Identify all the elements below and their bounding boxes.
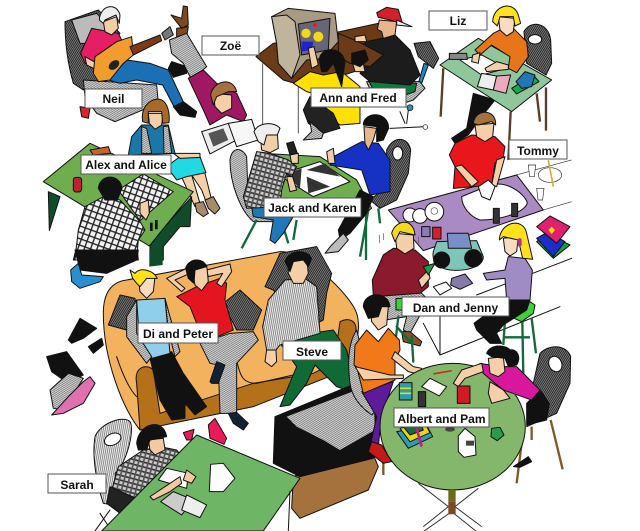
alex lower body — [71, 250, 138, 288]
neil: mug on floor — [80, 107, 90, 118]
fred: jeans — [338, 33, 383, 67]
label: Liz — [429, 11, 487, 30]
label: Alex and Alice — [81, 155, 171, 174]
plates — [403, 202, 444, 223]
karen: black trousers and shoe — [338, 190, 373, 240]
dan: face — [395, 233, 414, 254]
label: Neil: Neil — [102, 92, 125, 106]
alex: jeans — [73, 243, 138, 260]
alex table top — [43, 143, 193, 246]
steve: green trousers — [277, 330, 357, 407]
liz — [440, 6, 552, 160]
label: Steve: Steve — [296, 345, 328, 359]
peter: head — [192, 265, 208, 291]
green fruit — [491, 427, 504, 441]
steve: hair — [285, 252, 312, 272]
label: Tommy: Tommy — [517, 144, 559, 158]
trainers on the floor — [47, 318, 103, 415]
steve: hand — [265, 350, 277, 367]
jack and karen — [230, 150, 297, 248]
liz: calculator — [449, 53, 467, 59]
shoes — [68, 318, 103, 353]
chessboard — [118, 174, 173, 221]
label: Albert and Pam — [394, 408, 489, 427]
monitor — [272, 8, 338, 78]
albert: face — [370, 307, 388, 330]
dan: hand — [418, 270, 430, 288]
jenny: yellow hair — [499, 223, 533, 259]
albert: chair — [349, 330, 377, 415]
label: Tommy — [509, 140, 567, 159]
sarah: table leg — [288, 492, 290, 531]
jenny: stool — [503, 318, 536, 375]
seat — [367, 82, 425, 103]
cushion: right of peter — [223, 290, 262, 330]
alice: sandals — [195, 197, 220, 217]
karen: face — [364, 127, 377, 150]
label: Ann and Fred — [311, 88, 406, 107]
ann — [293, 47, 360, 140]
pam: chair — [527, 347, 571, 427]
desk leg lines — [263, 63, 298, 133]
jack: hand raised — [287, 142, 297, 155]
table legs — [360, 208, 380, 260]
dish — [478, 180, 495, 200]
fred: red cap — [377, 7, 403, 24]
alice: face — [148, 113, 163, 129]
tv hatching — [287, 390, 375, 450]
fred: black jacket — [353, 35, 420, 85]
di: pink shoes — [183, 418, 227, 444]
phone — [422, 378, 447, 396]
zoe: feet up — [171, 6, 188, 38]
label: Di and Peter — [138, 323, 218, 343]
pen — [433, 371, 452, 374]
tommy: hair — [473, 112, 496, 125]
zoe: newspaper — [202, 119, 258, 154]
label: Dan and Jenny — [402, 297, 509, 316]
label: Jack and Karen — [264, 198, 361, 217]
peter: red shirt — [177, 278, 233, 338]
label: Sarah — [48, 474, 106, 493]
label: Zoë — [202, 36, 259, 55]
tommy: red shirt — [449, 135, 505, 188]
neil: guitar — [93, 27, 173, 82]
pam: arms — [453, 363, 510, 403]
albert: hair — [363, 295, 390, 318]
label: Zoë: Zoë — [220, 39, 241, 53]
radio — [433, 233, 483, 270]
alex table — [43, 143, 193, 260]
jenny: face — [503, 237, 518, 256]
albert: orange shirt — [354, 328, 400, 393]
sarah: head — [148, 438, 165, 455]
alex: hair — [98, 177, 122, 200]
liz: blue book stack — [512, 72, 539, 94]
sarah table and sarah — [94, 419, 300, 531]
peter — [167, 260, 262, 430]
dan: trousers and shoe — [383, 290, 428, 333]
zoe — [169, 6, 258, 154]
stool stem and wheels — [390, 110, 427, 128]
jenny: purple shirt — [483, 257, 532, 300]
desk — [256, 20, 393, 87]
jack: face — [260, 132, 278, 153]
label: Albert and Pam: Albert and Pam — [397, 412, 486, 426]
sarah: dark trousers — [107, 487, 140, 513]
peter: grey trousers — [200, 332, 258, 413]
jenny: seat — [511, 302, 535, 322]
label: Neil — [85, 89, 142, 108]
liz: face — [498, 17, 515, 36]
ann: yellow top — [293, 72, 360, 125]
dan: red sweater — [372, 248, 428, 297]
liz: chair — [524, 24, 552, 75]
albert: chair legs — [383, 420, 563, 483]
sarah: papers and card — [158, 463, 235, 518]
liz: legs under table — [452, 93, 495, 143]
albert: purple shorts — [362, 382, 393, 447]
di: blonde hair — [130, 270, 157, 287]
steve: striped sweater — [263, 278, 320, 350]
red-edged board — [278, 162, 350, 197]
peter: arms behind head — [167, 264, 232, 292]
karen: blue jacket — [330, 142, 390, 195]
di: head — [138, 277, 155, 298]
dan — [383, 290, 428, 362]
liz: paper — [460, 55, 507, 75]
bag — [47, 352, 95, 415]
card table — [257, 153, 372, 217]
liz: table legs — [441, 68, 546, 160]
ann: hand — [308, 47, 318, 68]
liz: hands — [472, 53, 508, 72]
jenny: disc player — [451, 274, 473, 289]
karen and table — [257, 115, 411, 260]
sarah: plaid jacket — [112, 447, 195, 500]
label: Jack and Karen: Jack and Karen — [268, 201, 357, 215]
alice: hair — [142, 99, 169, 123]
sarah: hair — [137, 425, 167, 450]
jack upper body — [243, 124, 298, 208]
fred stool and chair — [338, 7, 439, 129]
albert and pam table — [349, 295, 571, 531]
purple counter — [388, 175, 543, 251]
albert: arms — [355, 352, 422, 380]
sink — [462, 184, 527, 220]
label: Steve — [283, 341, 341, 360]
alex: hand — [140, 200, 149, 220]
table base — [418, 483, 482, 531]
table leg green — [149, 250, 163, 267]
di: black trousers — [150, 352, 207, 420]
ann and fred desk — [256, 8, 393, 133]
tommy: arms — [455, 157, 505, 187]
alice: top — [128, 125, 175, 155]
chair back — [414, 42, 439, 68]
sarah: hands — [150, 470, 196, 500]
zoe: brown hair — [211, 82, 237, 105]
jeans and feet — [75, 250, 138, 273]
jenny: headphone — [518, 238, 522, 246]
steve: head — [288, 258, 308, 283]
alice — [128, 99, 220, 217]
jack: chair — [230, 150, 280, 222]
zoe: face — [213, 93, 232, 113]
zoe: grey trousers — [169, 33, 207, 80]
tommy: face — [475, 123, 494, 142]
round table — [380, 363, 525, 490]
table legs — [48, 192, 192, 260]
jenny — [418, 257, 536, 375]
sarah: chair — [94, 419, 131, 507]
neil: face — [103, 17, 118, 35]
cushion: left of di — [108, 295, 137, 330]
ann: hair — [319, 50, 345, 87]
fred: face — [377, 20, 397, 38]
neil: pink shirt — [81, 28, 123, 72]
alex: plaid shirt — [75, 197, 145, 260]
label: Alex and Alice: Alex and Alice — [85, 158, 167, 172]
label: Sarah: Sarah — [60, 478, 94, 492]
zoe: magenta top — [188, 70, 247, 125]
book pile — [537, 216, 570, 258]
fred: hands — [353, 35, 367, 72]
sarah: table — [102, 435, 300, 531]
pam: pink shirt — [480, 363, 540, 400]
dark disc — [445, 427, 455, 432]
neil — [65, 7, 197, 122]
pam: face — [488, 357, 505, 377]
di: grey sleeves — [127, 298, 180, 363]
liz: open book — [477, 73, 511, 93]
dan: yellow cap — [392, 222, 415, 242]
cd case — [433, 282, 452, 295]
jack: plaid shirt — [243, 152, 297, 208]
label: Liz: Liz — [450, 14, 466, 28]
right sketch lines — [510, 160, 572, 210]
floor lines — [423, 258, 572, 355]
book stack — [397, 423, 433, 448]
tv stand — [292, 447, 378, 518]
neil: arm — [85, 57, 118, 72]
alice: cyan shorts — [167, 157, 206, 180]
jack: jeans — [252, 188, 293, 243]
pam: black skirt — [527, 390, 549, 425]
di — [108, 270, 227, 444]
alice: knee — [173, 153, 200, 158]
karen: chair — [370, 139, 411, 208]
label: Dan and Jenny: Dan and Jenny — [413, 301, 498, 315]
karen: curly hair — [363, 115, 389, 142]
neil: white hair — [99, 7, 120, 23]
jenny: trousers — [474, 300, 530, 343]
ann: legs — [303, 122, 323, 140]
red can — [73, 177, 82, 192]
liz: table — [440, 38, 552, 112]
ann: stool — [303, 97, 340, 133]
glass and plate sketches — [528, 160, 562, 200]
dan: green stool — [396, 317, 413, 362]
liz: yellow hair — [493, 6, 521, 26]
neil: jeans — [108, 60, 183, 107]
bottle — [418, 392, 426, 407]
neil: shoes — [168, 62, 197, 117]
jack: chair legs — [242, 220, 297, 248]
orange case — [90, 147, 111, 155]
jack: white hair — [254, 124, 280, 145]
peter: hair — [186, 260, 207, 283]
chess pieces — [150, 220, 158, 231]
mug and red cup — [422, 227, 430, 237]
label: Ann and Fred: Ann and Fred — [319, 91, 397, 105]
peter: shoes — [210, 362, 248, 430]
kitchen counter — [388, 112, 572, 258]
albert: red shoe — [368, 442, 392, 463]
cards — [423, 263, 435, 275]
tv body — [273, 382, 378, 477]
taps — [493, 203, 518, 223]
di: blue top — [137, 298, 170, 358]
liz: orange top — [475, 28, 528, 73]
milk carton — [458, 428, 476, 457]
alice: legs — [180, 167, 212, 207]
pam: shoe — [513, 457, 532, 467]
television — [273, 382, 378, 518]
cup — [399, 383, 412, 400]
cushion: behind steve — [265, 247, 332, 330]
pam: hair — [487, 346, 519, 367]
neil: armchair — [65, 10, 120, 90]
label: Di and Peter: Di and Peter — [143, 327, 213, 341]
sofa — [103, 252, 358, 430]
dan: music notes — [379, 233, 418, 243]
karen: hand — [327, 148, 335, 163]
steve and the cushions behind him — [263, 247, 357, 407]
red mug — [457, 386, 470, 403]
